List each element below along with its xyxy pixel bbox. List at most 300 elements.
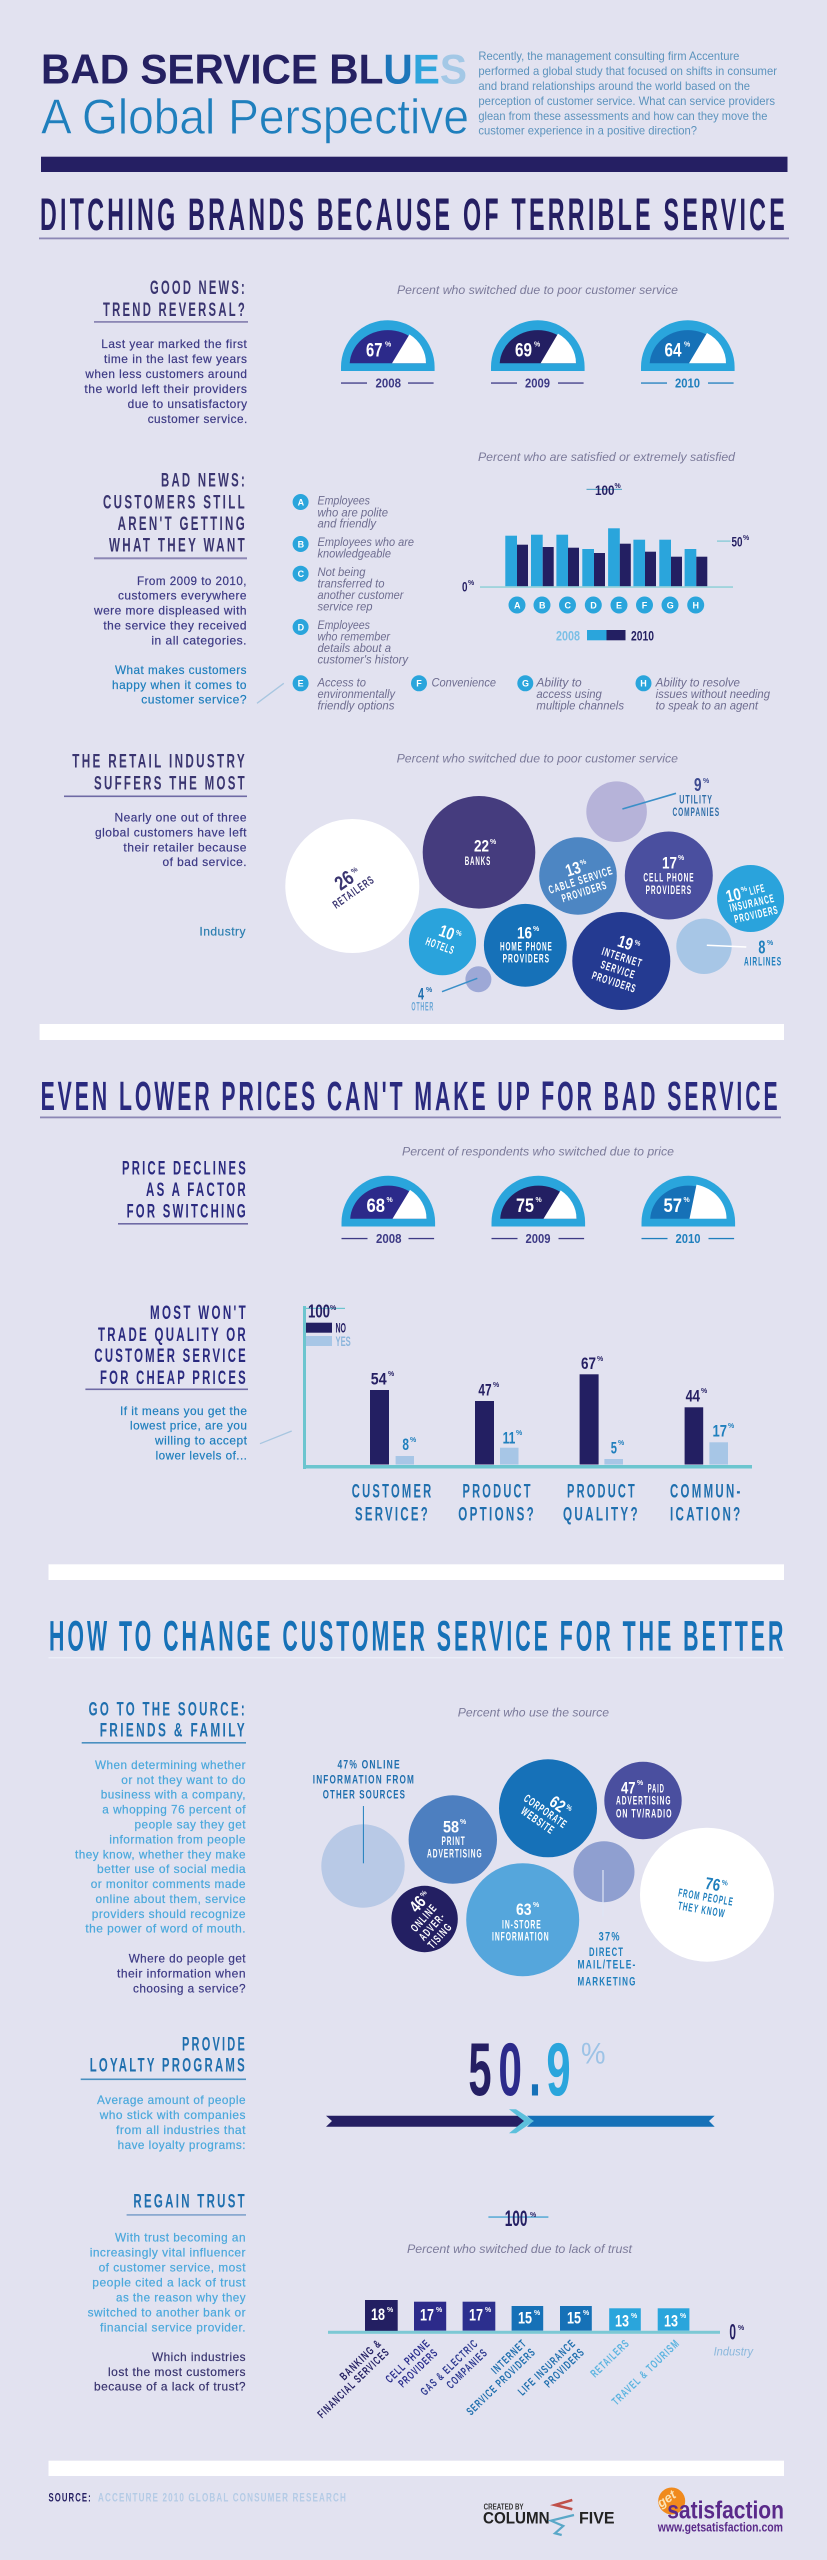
logo: get satisfaction: www.getsatisfaction.com	[657, 2520, 783, 2535]
bar chart: satisfaction	[462, 482, 750, 644]
callout: other: OTHER	[411, 1002, 434, 1014]
label: internet: 19	[615, 932, 635, 954]
legend list: C	[298, 569, 305, 579]
label: paid advertising: PAID	[648, 1783, 665, 1795]
heading: most won't	[85, 1303, 248, 1390]
text: trust body: switched to another bank or	[88, 2305, 246, 2319]
text: trust body: of customer service, most	[99, 2261, 246, 2275]
legend list: Employees	[318, 494, 370, 508]
text: source question: choosing a service?	[133, 1981, 246, 1995]
axis end: 0%: %	[738, 2325, 745, 2332]
label: internet: SERVICE	[599, 959, 637, 982]
title: BAD SERVICE BLUES	[41, 45, 467, 92]
label: home phone: 16	[517, 923, 532, 942]
text: source body: or not they want to do	[121, 1773, 246, 1787]
text: trust body: financial service provider.	[100, 2320, 246, 2334]
callout: utility: %	[703, 778, 710, 785]
heading: loyalty	[81, 2034, 247, 2080]
text: loyalty body: Average amount of people	[97, 2093, 246, 2107]
arrow: loyalty ribbon	[326, 2109, 715, 2133]
callout: utility	[622, 775, 720, 819]
text: source body: business with a company,	[101, 1788, 246, 1802]
axis labels: SERVICE?	[355, 1505, 430, 1526]
text: trust body: people cited a lack of trust	[92, 2276, 246, 2290]
footer	[48, 2487, 784, 2535]
big number: 50.9%	[468, 2028, 606, 2112]
legend list: Ability to resolve	[655, 675, 740, 689]
gauge 2008: %	[386, 1197, 394, 1204]
label: retailers	[319, 858, 377, 911]
marker: 100%	[488, 2206, 548, 2231]
caption: Percent who are satisfied or extremely satisfied	[478, 450, 735, 464]
callout: online information: INFORMATION FROM	[313, 1774, 415, 1786]
rotated industry labels: LIFE INSURANCE	[516, 2338, 579, 2398]
axis labels: CUSTOMER	[352, 1482, 434, 1503]
legend list: customer's history	[318, 652, 409, 666]
label: internet	[590, 927, 652, 996]
heading: trust: REGAIN TRUST	[133, 2191, 247, 2212]
label: corporate website: 62	[546, 1792, 569, 1816]
gauge 2010: 2010	[676, 1231, 700, 1246]
intro text: Recently, the management consulting firm Accenture	[478, 49, 740, 63]
chart legend: 2008	[556, 628, 580, 644]
label: cell phone: CELL PHONE	[643, 873, 695, 885]
axis end: 0%: Industry	[714, 2344, 754, 2358]
text: question: lowest price, are you	[130, 1419, 247, 1433]
label: hotels: HOTELS	[424, 936, 456, 957]
legend list: F	[416, 679, 422, 689]
text: question: happy when it comes to	[112, 678, 247, 692]
rotated industry labels: FINANCIAL SERVICES	[316, 2346, 392, 2421]
big number: 50.9%: .	[529, 2028, 541, 2112]
bar chart: satisfaction: %	[614, 483, 622, 490]
label: cell phone	[643, 853, 695, 897]
value labels: %	[534, 2310, 541, 2317]
text: question: willing to accept	[154, 1434, 248, 1448]
label: cable: 13	[563, 858, 583, 881]
label: in-store	[492, 1900, 550, 1944]
heading: bad news	[94, 471, 247, 559]
heading: retail	[64, 752, 247, 797]
text: source body	[75, 1758, 246, 1936]
text: retail body	[95, 811, 247, 869]
callout: utility: COMPANIES	[672, 807, 720, 819]
value labels: %	[680, 2313, 687, 2320]
callout: airlines: %	[767, 940, 774, 947]
gauge 2010: 57	[664, 1195, 682, 1217]
text: bad news body: in all categories.	[151, 633, 247, 647]
bar chart: satisfaction: 0	[462, 579, 468, 595]
rotated industry labels: GAS & ELECTRIC	[419, 2338, 481, 2398]
bar chart: trade-offs	[303, 1302, 752, 1526]
callout: airlines	[707, 937, 782, 968]
intro text	[478, 49, 777, 138]
label: home phone: HOME PHONE	[500, 942, 553, 954]
chart letter markers: E	[616, 600, 622, 610]
text: bad news body	[93, 574, 247, 647]
gauge 2008: %	[385, 342, 392, 349]
rotated industry labels: RETAILERS	[589, 2338, 632, 2380]
caption: Percent who switched due to poor customer service	[397, 283, 678, 297]
rotated industry labels: COMPANIES	[445, 2347, 490, 2392]
value labels: 17	[469, 2306, 483, 2325]
text: source body: online about them, service	[96, 1892, 246, 1906]
value labels: 44	[686, 1387, 700, 1406]
bar chart: satisfaction: 50	[732, 534, 743, 550]
axis labels: PRODUCT	[462, 1482, 533, 1503]
text: source question: Where do people get	[129, 1952, 246, 1966]
gauge 2010	[642, 1176, 735, 1246]
text: retail body: their retailer because	[123, 840, 247, 854]
chart legend	[306, 1320, 351, 1349]
rotated industry labels	[316, 2338, 682, 2421]
text: source body: better use of social media	[97, 1862, 246, 1876]
label: life insurance: LIFE	[748, 883, 767, 898]
label: print: %	[460, 1819, 467, 1826]
legend list: transferred to	[318, 576, 385, 590]
legend list: another customer	[318, 588, 404, 602]
heading: most won't: CUSTOMER SERVICE	[94, 1346, 248, 1367]
heading: loyalty: LOYALTY PROGRAMS	[90, 2056, 247, 2077]
label: from people: 76	[704, 1874, 722, 1895]
label: banks	[465, 837, 497, 868]
legend list: multiple channels	[536, 699, 624, 713]
big number: 50.9%: 5	[468, 2028, 492, 2112]
label: home phone	[500, 923, 553, 966]
legend list	[293, 494, 770, 713]
label: print: PRINT	[442, 1836, 466, 1848]
rotated industry labels: CELL PHONE	[384, 2338, 433, 2386]
legend list: Convenience	[432, 675, 496, 689]
text: source question	[117, 1952, 246, 1995]
value labels: %	[597, 1356, 604, 1363]
label: from people: THEY KNOW	[677, 1900, 726, 1921]
logo: get satisfaction	[653, 2487, 784, 2535]
text: source question: their information when	[117, 1966, 246, 1980]
value labels: %	[387, 2307, 394, 2314]
text: question	[112, 663, 247, 707]
label: internet: PROVIDERS	[590, 970, 638, 996]
heading: source: FRIENDS & FAMILY	[100, 1721, 247, 1742]
intro text: and brand relationships around the world based on the	[478, 79, 750, 93]
panel: loyalty programs	[81, 2028, 715, 2152]
axis labels: ICATION?	[670, 1505, 743, 1526]
chart legend: 2010	[631, 628, 654, 644]
chart letter markers: G	[667, 600, 674, 610]
gauge 2008	[342, 1176, 435, 1246]
callout: online information: OTHER SOURCES	[323, 1789, 406, 1801]
text: source body: they know, whether they make	[75, 1847, 246, 1861]
heading: price declines	[118, 1158, 248, 1225]
heading: most won't: TRADE QUALITY OR	[98, 1325, 248, 1346]
text: question: If it means you get the	[120, 1404, 247, 1418]
value labels: %	[436, 2307, 443, 2314]
title	[41, 45, 469, 144]
label: corporate website: WEBSITE	[518, 1806, 556, 1837]
rotated industry labels: PROVIDERS	[397, 2347, 441, 2390]
heading: good news: TREND REVERSAL?	[103, 300, 247, 321]
text: good news body: when less customers around	[84, 367, 247, 381]
axis labels: OPTIONS?	[458, 1505, 536, 1526]
callout: other	[411, 978, 477, 1014]
caption: Percent of respondents who switched due to price	[402, 1144, 674, 1158]
logo: column five: FIVE	[579, 2508, 614, 2527]
value labels: 17	[712, 1422, 727, 1441]
callout: direct mail: 37%	[599, 1932, 621, 1944]
axis labels: COMMUN-	[670, 1482, 743, 1503]
label: paid advertising: %	[637, 1780, 644, 1787]
caption: Percent who switched due to lack of trust	[407, 2242, 633, 2256]
gauge 2008: 68	[366, 1195, 385, 1217]
logo: column five: COLUMN	[483, 2508, 550, 2527]
legend list: Employees	[318, 618, 370, 632]
value labels: 15	[567, 2308, 581, 2327]
text: question: customer service?	[141, 693, 247, 707]
value labels: 15	[518, 2308, 532, 2327]
text: question	[120, 1404, 248, 1462]
bubble chart: sources	[313, 1759, 774, 1989]
gauge 2009: %	[536, 1197, 542, 1204]
text: source body: a whopping 76 percent of	[102, 1803, 246, 1817]
gauge 2010: 2010	[675, 376, 700, 391]
axis labels	[352, 1482, 743, 1526]
panel: retail	[64, 751, 784, 1014]
text: bad news body: From 2009 to 2010,	[137, 574, 247, 588]
value labels: 18	[371, 2305, 385, 2324]
callout: utility: 9	[694, 775, 702, 795]
intro text: customer experience in a positive direction?	[478, 124, 697, 138]
label: life insurance: INSURANCE	[729, 893, 776, 915]
text: good news body: Last year marked the first	[101, 337, 247, 351]
heading: source: GO TO THE SOURCE:	[89, 1700, 247, 1721]
label: retailers: %	[350, 866, 360, 876]
label: online advertising: ADVER-	[417, 1911, 448, 1943]
heading: price declines: AS A FACTOR	[146, 1180, 248, 1201]
text: retail body: global customers have left	[95, 826, 247, 840]
callout: direct mail	[578, 1870, 636, 1989]
gauge 2008: 2008	[376, 376, 401, 391]
gauge 2009: 2009	[525, 376, 550, 391]
callout: direct mail: DIRECT	[589, 1947, 624, 1959]
marker: 100%: %	[530, 2212, 537, 2219]
chart letter markers: A	[514, 600, 521, 610]
value labels: 5	[611, 1438, 617, 1457]
panel: bad news	[93, 450, 770, 713]
heading: bad news: AREN'T GETTING	[118, 514, 247, 535]
legend list: who remember	[318, 629, 391, 643]
label: hotels: 10	[436, 921, 457, 944]
label: life insurance: PROVIDERS	[733, 904, 780, 926]
panel: good news	[84, 278, 735, 426]
legend list: Ability to	[535, 675, 582, 689]
legend list: to speak to an agent	[656, 699, 759, 713]
chart letter markers: F	[642, 600, 648, 610]
axis labels: QUALITY?	[563, 1505, 640, 1526]
value labels	[371, 1354, 735, 1457]
label: industry: Industry	[199, 924, 246, 938]
label: corporate website: %	[564, 1804, 574, 1813]
label: cell phone: PROVIDERS	[646, 885, 692, 897]
label: paid advertising: 47	[621, 1778, 636, 1797]
gauge 2009: 69	[515, 340, 532, 362]
label: life insurance	[724, 877, 780, 927]
legend list: friendly options	[318, 699, 394, 713]
label: internet: %	[633, 939, 642, 948]
caption: Percent who use the source	[458, 1705, 609, 1719]
legend list: H	[640, 679, 647, 689]
value labels: 13	[615, 2312, 629, 2331]
value labels: 47	[478, 1380, 492, 1399]
heading: most won't: FOR CHEAP PRICES	[100, 1368, 248, 1389]
text: trust body: increasingly vital influencer	[90, 2246, 246, 2260]
text: source body: providers should recognize	[92, 1907, 246, 1921]
chart letter markers: D	[590, 600, 597, 610]
bar chart: satisfaction: 100	[595, 482, 615, 498]
callout: direct mail: MARKETING	[578, 1977, 636, 1989]
text: good news body	[84, 337, 248, 426]
bar chart: trade-offs: %	[330, 1305, 337, 1312]
heading: good news	[94, 278, 248, 323]
value labels: %	[410, 1437, 417, 1444]
rotated industry labels: PROVIDERS	[542, 2346, 587, 2390]
chart letter markers: C	[564, 600, 572, 610]
header	[41, 45, 788, 172]
heading: price declines: PRICE DECLINES	[122, 1158, 248, 1179]
logo: column five: CREATED BY	[484, 2502, 524, 2511]
legend list: D	[298, 622, 305, 632]
bubble chart: industries	[285, 775, 784, 1014]
gauge 2009	[491, 320, 585, 391]
value labels: %	[618, 1440, 625, 1447]
text: loyalty body	[97, 2093, 246, 2152]
callout: other: 4	[418, 984, 424, 1003]
text: source body: people say they get	[134, 1818, 246, 1832]
value labels: %	[631, 2313, 638, 2320]
text: good news body: customer service.	[148, 412, 248, 426]
text: retail body: of bad service.	[162, 855, 247, 869]
text: source body: the power of word of mouth.	[85, 1922, 246, 1936]
label: cable	[542, 849, 618, 908]
heading: bad news: BAD NEWS:	[161, 471, 247, 492]
label: retailers: 26	[331, 867, 358, 895]
bar chart: lack of trust	[316, 2300, 754, 2421]
label: online advertising: ONLINE	[409, 1902, 440, 1935]
label: online advertising: TISING	[426, 1921, 455, 1951]
axis end: 0%: 0	[729, 2319, 736, 2344]
callout: other: %	[426, 987, 433, 994]
value labels: %	[701, 1388, 708, 1395]
label: hotels: %	[454, 929, 463, 938]
label: in-store: IN-STORE	[502, 1919, 542, 1931]
label: cable: PROVIDERS	[560, 880, 609, 905]
label: life insurance: 10	[724, 884, 743, 906]
gauge 2008	[341, 320, 435, 391]
text: loyalty body: from all industries that	[116, 2123, 246, 2137]
value labels: %	[493, 1382, 500, 1389]
text: loyalty body: who stick with companies	[99, 2108, 246, 2122]
label: from people	[675, 1869, 738, 1922]
label: hotels	[424, 918, 464, 958]
axis labels: PRODUCT	[567, 1482, 637, 1503]
callout: online information	[313, 1759, 415, 1863]
chart letter markers	[508, 596, 704, 614]
label: cell phone: %	[678, 855, 685, 862]
text: trust question	[94, 2350, 246, 2394]
text: trust body	[88, 2231, 246, 2334]
panel: regain trust	[88, 2191, 754, 2421]
legend list: who are polite	[318, 505, 388, 519]
value labels: 8	[402, 1435, 409, 1454]
intro text: perception of customer service. What can service providers	[478, 94, 775, 108]
legend list: Employees who are	[318, 535, 414, 549]
text: trust question: lost the most customers	[108, 2365, 246, 2379]
legend list: Access to	[317, 675, 366, 689]
legend list: G	[522, 679, 529, 689]
chart letter markers: B	[539, 600, 546, 610]
gauge 2008: 2008	[376, 1231, 402, 1246]
text: bad news body: customers everywhere	[118, 589, 247, 603]
label: from people: %	[721, 1880, 729, 1888]
source line	[48, 2493, 347, 2505]
label: life insurance: %	[740, 886, 749, 894]
label: cell phone: 17	[662, 853, 677, 872]
legend list: B	[298, 540, 305, 550]
value labels: 13	[664, 2312, 678, 2331]
marker: 100%: 100	[505, 2206, 527, 2231]
gauge 2010: 64	[664, 340, 682, 362]
heading: price declines: FOR SWITCHING	[127, 1201, 248, 1222]
label: paid advertising: ADVERTISING	[616, 1795, 671, 1807]
title: A Global Perspective	[41, 90, 469, 144]
label: print	[427, 1817, 483, 1860]
bar chart: satisfaction: %	[468, 580, 475, 587]
label: corporate website: CORPORATE	[521, 1793, 569, 1831]
value labels: 17	[420, 2306, 434, 2325]
caption: Percent who switched due to poor customer service	[397, 751, 678, 765]
legend list: knowledgeable	[318, 547, 391, 561]
chart letter markers: H	[692, 600, 699, 610]
bar chart: trade-offs: 100	[308, 1302, 330, 1322]
callout: airlines: AIRLINES	[744, 956, 782, 968]
text: bad news body: were more displeased with	[93, 604, 247, 618]
callout: airlines: 8	[758, 937, 765, 957]
text: loyalty body: have loyalty programs:	[118, 2138, 246, 2152]
big number: 50.9%: %	[581, 2037, 606, 2070]
gauge 2010: %	[684, 1197, 690, 1204]
heading: trust	[127, 2191, 247, 2216]
text: source body: or monitor comments made	[91, 1877, 246, 1891]
gauge 2009	[492, 1176, 585, 1246]
label: online advertising: %	[419, 1889, 429, 1899]
rotated industry labels: SERVICE PROVIDERS	[465, 2346, 538, 2418]
value labels: 54	[371, 1369, 387, 1388]
legend list: E	[298, 679, 304, 689]
label: in-store: INFORMATION	[492, 1932, 550, 1944]
label: cable: %	[579, 858, 588, 867]
panel: most won't trade	[85, 1302, 752, 1526]
heading: retail: THE RETAIL INDUSTRY	[72, 752, 247, 773]
value labels: %	[388, 1371, 395, 1378]
callout: utility: UTILITY	[679, 794, 713, 806]
rotated industry labels: INTERNET	[489, 2338, 529, 2377]
text: source body: information from people	[109, 1833, 246, 1847]
text: good news body: due to unsatisfactory	[128, 397, 248, 411]
intro text: performed a global study that focused on shifts in consumer	[478, 64, 777, 78]
big number: 50.9%: 9	[546, 2028, 571, 2112]
label: in-store: 63	[516, 1900, 532, 1919]
panel: go to the source	[75, 1700, 774, 1995]
value labels: %	[485, 2307, 492, 2314]
